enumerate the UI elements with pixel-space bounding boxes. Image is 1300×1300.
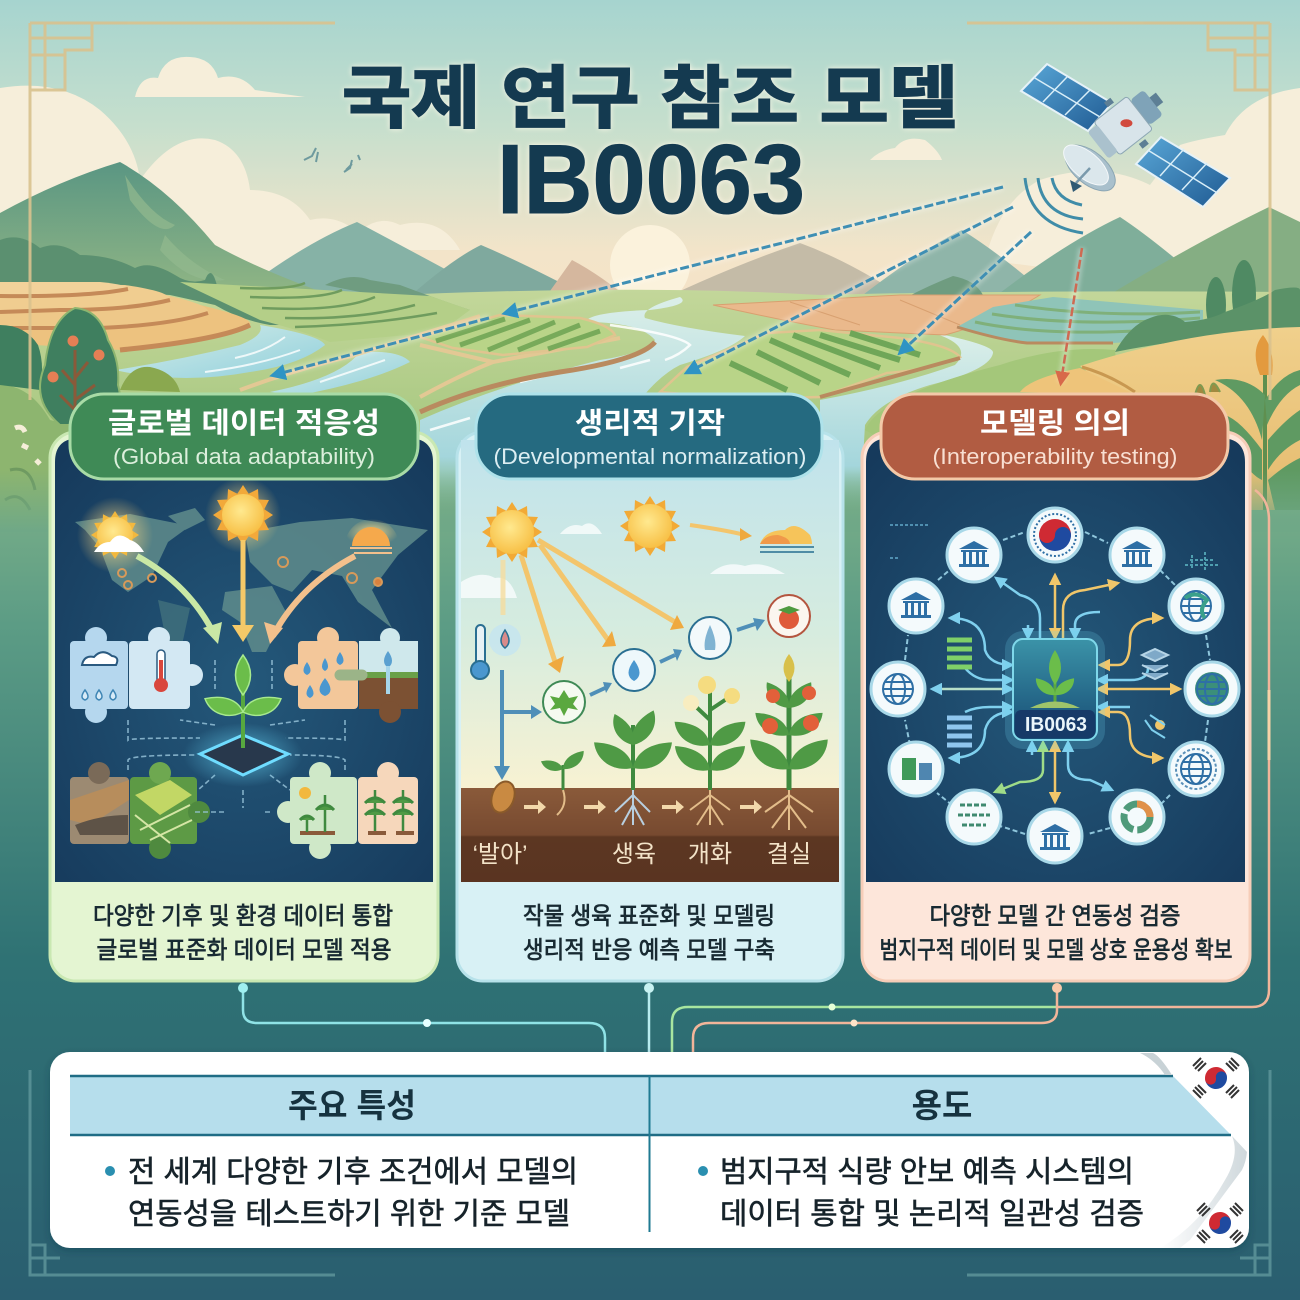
embankments <box>240 316 620 397</box>
clouds <box>461 523 785 598</box>
node: pie chart <box>1110 790 1164 844</box>
usage text: 범지구적 식량 안보 예측 시스템의 <box>720 1156 1134 1189</box>
partner nodes <box>871 508 1239 863</box>
birds <box>304 148 360 172</box>
soil <box>461 788 839 882</box>
right green field <box>660 330 960 398</box>
panel description: 다양한 기후 및 환경 데이터 통합 <box>93 903 393 930</box>
node: research lab <box>1028 809 1082 863</box>
solar panel 1 <box>1021 64 1112 131</box>
frame ornament: top left <box>30 23 335 400</box>
orange fields <box>713 295 1040 335</box>
panel description: 글로벌 표준화 데이터 모델 적용 <box>96 937 392 964</box>
river bank <box>420 342 655 412</box>
left green field <box>420 315 615 355</box>
tree line left <box>0 237 287 325</box>
signal waves <box>1025 178 1083 233</box>
corn plant right <box>1215 335 1300 510</box>
node: institution <box>947 528 1001 582</box>
puzzle: terrain and fields <box>70 762 210 859</box>
satellite data arrows <box>274 187 1082 382</box>
side hills <box>0 325 180 530</box>
panel header: (Global data adaptability) <box>113 444 375 469</box>
node: Korea seal <box>1028 508 1082 562</box>
terraced field left orange <box>0 282 250 350</box>
panel header: 글로벌 데이터 적응성 <box>108 407 380 440</box>
suns <box>77 477 399 573</box>
right trees <box>1115 260 1300 352</box>
rice terrace right <box>957 297 1203 343</box>
card background <box>50 1052 1249 1248</box>
right river <box>820 332 993 510</box>
column divider <box>648 1076 650 1232</box>
panel description: 범지구적 데이터 및 모델 상호 운용성 확보 <box>880 937 1232 964</box>
panel body <box>457 432 843 981</box>
stage circles <box>543 595 810 723</box>
flowering plant <box>670 676 750 790</box>
puzzle: plant growth <box>277 762 418 859</box>
panel description: 작물 생육 표준화 및 모델링 <box>523 903 775 930</box>
puzzle: water and soil <box>284 627 418 723</box>
panel: interoperability testing <box>862 394 1250 981</box>
satellite body <box>1080 74 1178 169</box>
panel body <box>862 432 1250 981</box>
page curl <box>1140 1053 1247 1248</box>
icon: Korean flag bottom <box>1197 1203 1243 1243</box>
puzzle: rain and temperature <box>70 627 203 723</box>
satellite dish <box>1057 136 1123 200</box>
growth stage labels: 개화 <box>688 841 732 868</box>
frame ornament: top right <box>967 23 1270 400</box>
network arrows <box>932 575 1180 802</box>
landscape fade into lower background <box>0 470 1300 532</box>
node: climate map <box>1169 579 1223 633</box>
key features text: 전 세계 다양한 기후 조건에서 모델의 <box>128 1156 578 1189</box>
node: charts <box>889 742 943 796</box>
thermometer and drop <box>471 624 521 679</box>
growth stage labels: ‘발아’ <box>473 841 527 868</box>
icon: satellite <box>1021 64 1230 233</box>
node: United Nations <box>1169 742 1223 796</box>
fruiting plant <box>744 654 834 790</box>
panel description <box>523 903 775 964</box>
panel header <box>70 394 418 479</box>
panel description: 생리적 반응 예측 모델 구축 <box>523 937 775 964</box>
fruit tree left <box>40 308 120 425</box>
network background <box>866 438 1245 882</box>
table header band: 주요 특성 <box>288 1087 416 1124</box>
key features text: 연동성을 테스트하기 위한 기준 모델 <box>128 1198 570 1231</box>
panel header <box>476 394 822 479</box>
growth stage labels: 결실 <box>767 841 811 868</box>
usage text: 데이터 통합 및 논리적 일관성 검증 <box>720 1198 1144 1231</box>
sun arrows <box>503 525 752 673</box>
left river <box>115 325 410 395</box>
node: earth <box>1185 662 1239 716</box>
data flow lines <box>128 660 345 812</box>
panel description: 다양한 모델 간 연동성 검증 <box>930 903 1180 930</box>
panel header <box>881 394 1228 479</box>
plant hub <box>183 655 303 787</box>
panel header: 모델링 의의 <box>980 407 1130 440</box>
suns <box>482 496 814 562</box>
decorative clouds <box>0 57 1300 305</box>
growth stage labels: 생육 <box>612 841 656 868</box>
green slope <box>865 349 1120 450</box>
far ridges <box>325 276 983 310</box>
frame ornament: bottom corners <box>30 1070 1270 1275</box>
node: institution <box>1110 528 1164 582</box>
title line 1: 국제 연구 참조 모델 <box>342 61 958 137</box>
solar panel 2 <box>1136 137 1230 207</box>
summary table card <box>50 1052 1249 1248</box>
map pins <box>118 557 382 589</box>
panel header: 생리적 기작 <box>575 407 725 440</box>
key features text <box>105 1156 578 1231</box>
icon: Korean flag top <box>1193 1058 1239 1098</box>
growth arrows in soil <box>524 800 762 814</box>
node: data globe <box>871 662 925 716</box>
illustration: world map <box>75 508 428 652</box>
landscape <box>0 162 1300 532</box>
plants <box>541 654 834 790</box>
node: network map <box>947 790 1001 844</box>
panel header: (Developmental normalization) <box>494 444 806 469</box>
node: institution <box>889 579 943 633</box>
title <box>342 61 958 234</box>
gold field right <box>1020 327 1300 510</box>
panel: global data adaptability <box>50 394 438 981</box>
central model chip <box>1005 631 1105 749</box>
panel header: (Interoperability testing) <box>932 444 1178 469</box>
roots and seed <box>487 778 813 830</box>
illustration sky <box>461 440 839 790</box>
panel body <box>50 432 438 981</box>
usage text <box>698 1156 1144 1231</box>
ring connectors <box>905 532 1210 834</box>
network side icons <box>890 525 1220 745</box>
ground <box>0 290 1300 520</box>
blue arrows <box>502 624 755 768</box>
seedling <box>541 750 588 790</box>
terraced field green <box>180 282 470 342</box>
river highlights <box>430 325 690 430</box>
connector lines <box>238 490 1269 1052</box>
panel: developmental normalization <box>457 394 843 981</box>
growth stage labels <box>473 841 811 868</box>
table header band: 용도 <box>912 1087 972 1124</box>
table header band <box>70 1076 1231 1135</box>
central river <box>420 297 745 510</box>
arrows from suns <box>137 540 355 644</box>
blue arrowheads <box>494 618 765 780</box>
central model chip: IB0063 <box>1025 714 1087 736</box>
illustration: background <box>55 438 433 882</box>
distant mountains <box>0 162 1300 335</box>
title line 2: IB0063 <box>497 124 805 234</box>
young plant <box>589 709 677 790</box>
panel description <box>880 903 1232 964</box>
panel description <box>93 903 393 964</box>
